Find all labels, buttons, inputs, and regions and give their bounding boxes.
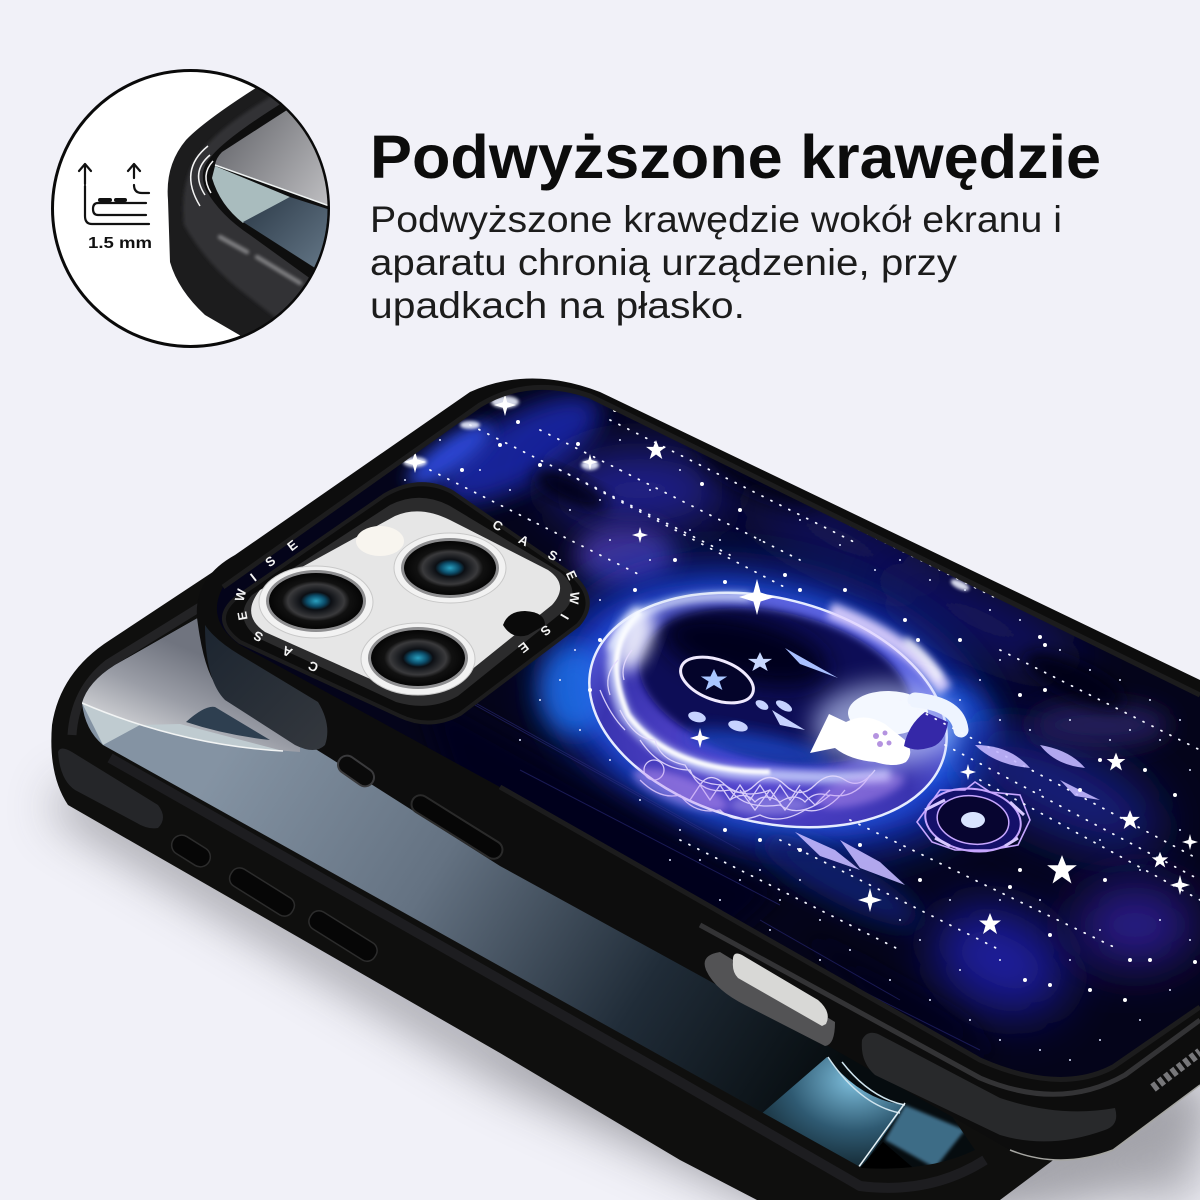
cat tail: [915, 700, 961, 730]
inset: black inner rim: [202, 104, 328, 278]
inset: translucent bumper: [182, 97, 314, 317]
ring lettering CASEWISE: S: [251, 628, 265, 645]
ring lettering CASEWISE: E: [284, 537, 301, 554]
crescent inner glow: [613, 610, 890, 778]
ring lettering CASEWISE: E: [563, 568, 580, 583]
ring lettering CASEWISE: A: [516, 532, 532, 550]
camera plate: [251, 511, 560, 695]
front side long button: [408, 792, 506, 862]
star dust small: [380, 420, 1190, 1060]
metal action button: [705, 952, 835, 1046]
ring lettering CASEWISE: E: [234, 610, 251, 621]
description text: Podwyższone krawędzie wokół ekranu i: [370, 199, 1062, 240]
microphone hole: [503, 611, 545, 636]
inset: impact arcs: [191, 146, 213, 206]
front side small button: [334, 752, 378, 790]
camera island: [224, 484, 588, 723]
description text: upadkach na płasko.: [370, 285, 745, 326]
inset: screen upper: [215, 110, 328, 206]
lens bottom: [361, 623, 475, 695]
ring lettering CASEWISE: A: [279, 643, 295, 660]
back screen glass: [82, 618, 974, 1168]
cat body: [848, 691, 928, 735]
back case carbon patch: [58, 748, 163, 828]
description text: [370, 199, 1062, 326]
bead chains: [430, 420, 1200, 950]
ring lettering CASEWISE: I: [247, 570, 259, 584]
ring lettering CASEWISE: C: [490, 517, 506, 535]
crescent inner dark: [635, 603, 914, 768]
crescent moon disc: [586, 572, 958, 848]
lens left: [259, 566, 373, 638]
inset: screen pale wedge: [212, 166, 290, 223]
crescent mandala lines: [600, 650, 875, 819]
mandala medallion: [917, 782, 1030, 857]
inset: 1.5 mm label: 1.5 mm: [88, 235, 152, 252]
crystal charms: [795, 745, 1100, 885]
sleeping white cat: [810, 683, 961, 767]
sparkle clusters: [403, 396, 971, 593]
galaxy base: [200, 370, 1200, 1090]
front case carbon patch bottom: [862, 1033, 1116, 1141]
inset: reflection line: [215, 165, 335, 208]
front case rim highlight: [700, 925, 1200, 1094]
galaxy artwork: [200, 370, 1200, 1090]
back screen bottom light shapes: [760, 1057, 905, 1170]
front case carbon patch left: [205, 625, 327, 750]
flash: [356, 526, 404, 556]
ring lettering CASEWISE: W: [566, 591, 583, 605]
ring lettering CASEWISE: S: [537, 622, 554, 639]
ring lettering CASEWISE: C: [305, 658, 321, 675]
island outer ring: [224, 484, 588, 723]
galaxy nebulae: [400, 375, 1195, 1060]
dark streaks: [474, 704, 980, 1050]
ring lettering CASEWISE: [232, 517, 583, 675]
description text: aparatu chronią urządzenie, przy: [370, 242, 958, 283]
ring lettering CASEWISE: S: [545, 547, 560, 564]
ring lettering CASEWISE: S: [262, 553, 279, 570]
front art rim: [223, 387, 1200, 1079]
ring lettering CASEWISE: W: [232, 587, 250, 603]
ring lettering CASEWISE: E: [515, 639, 532, 656]
heading: Podwyższone krawędzie: [370, 123, 1101, 191]
cat head and haunch: [810, 714, 910, 765]
inset: screen dark wedge: [243, 197, 328, 268]
back case rim light: [72, 545, 300, 735]
front case side body: [197, 378, 1200, 1160]
inset: edge height icon: [79, 164, 149, 224]
back screen pale curve: [82, 703, 283, 751]
drop shadow under phones: [50, 780, 1200, 1200]
back case body: [51, 480, 1100, 1200]
inset circle: raised edge detail: [52, 70, 340, 346]
star emblem dreamcatcher: [674, 648, 838, 733]
back phone side buttons: [168, 831, 381, 965]
inset: case body: [168, 88, 276, 336]
cat pattern: [904, 712, 948, 750]
ring lettering CASEWISE: I: [557, 611, 572, 622]
front case outer light edge: [1010, 1085, 1200, 1160]
star dust large: [462, 410, 1195, 1000]
front phone case: [197, 370, 1200, 1160]
inset: bumper highlight: [220, 237, 300, 283]
front case right speaker grille: [1153, 1052, 1200, 1088]
island inner bevel: [243, 498, 572, 706]
back screen top reflection: [82, 618, 300, 752]
large stars: [404, 394, 1198, 934]
back phone case: [51, 572, 1052, 1200]
lens top right: [394, 533, 506, 603]
